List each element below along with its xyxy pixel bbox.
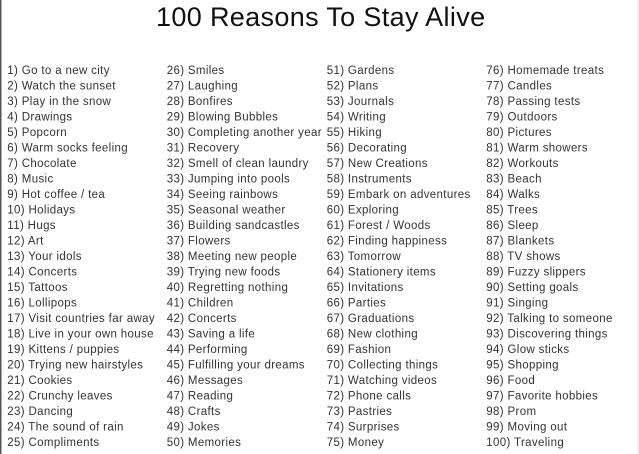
- column: reasons 1 to 25: 7) Chocolate: [7, 158, 77, 170]
- column: reasons 76 to 100: 95) Shopping: [486, 360, 559, 372]
- column: reasons 26 to 50: 41) Children: [167, 298, 234, 310]
- column: reasons 76 to 100: 97) Favorite hobbies: [486, 390, 598, 402]
- column: reasons 76 to 100: 82) Workouts: [486, 158, 559, 170]
- column: reasons 51 to 75: 74) Surprises: [327, 422, 400, 434]
- column: reasons 26 to 50: 49) Jokes: [167, 422, 220, 434]
- column: reasons 26 to 50: 27) Laughing: [167, 80, 238, 92]
- column: reasons 1 to 25: [7, 65, 155, 449]
- column: reasons 76 to 100: 80) Pictures: [486, 127, 552, 139]
- column: reasons 1 to 25: 17) Visit countries far away: [7, 313, 155, 325]
- column: reasons 1 to 25: 22) Crunchy leaves: [7, 390, 113, 402]
- column: reasons 76 to 100: 86) Sleep: [486, 220, 539, 232]
- column: reasons 76 to 100: 83) Beach: [486, 174, 542, 186]
- column: reasons 26 to 50: 35) Seasonal weather: [167, 204, 286, 216]
- column: reasons 1 to 25: 23) Dancing: [7, 406, 73, 418]
- column: reasons 26 to 50: 32) Smell of clean laundry: [167, 158, 309, 170]
- column: reasons 1 to 25: 2) Watch the sunset: [7, 80, 116, 92]
- column: reasons 76 to 100: 98) Prom: [486, 406, 536, 418]
- column: reasons 76 to 100: 89) Fuzzy slippers: [486, 266, 586, 278]
- column: reasons 1 to 25: 3) Play in the snow: [7, 96, 111, 108]
- column: reasons 1 to 25: 5) Popcorn: [7, 127, 67, 139]
- column: reasons 26 to 50: 48) Crafts: [167, 406, 221, 418]
- column: reasons 1 to 25: 8) Music: [7, 174, 54, 186]
- column: reasons 1 to 25: 10) Holidays: [7, 204, 75, 216]
- column: reasons 51 to 75: 62) Finding happiness: [327, 236, 447, 248]
- column: reasons 26 to 50: 45) Fulfilling your dreams: [167, 360, 305, 372]
- column: reasons 51 to 75: 53) Journals: [327, 96, 394, 108]
- column: reasons 76 to 100: 85) Trees: [486, 204, 538, 216]
- column: reasons 76 to 100: 91) Singing: [486, 298, 548, 310]
- column: reasons 26 to 50: 30) Completing another year: [167, 127, 322, 139]
- column: reasons 51 to 75: 63) Tomorrow: [327, 251, 401, 263]
- column: reasons 26 to 50: 47) Reading: [167, 390, 233, 402]
- column: reasons 76 to 100: 78) Passing tests: [486, 96, 580, 108]
- column: reasons 76 to 100: 90) Setting goals: [486, 282, 579, 294]
- column: reasons 51 to 75: 73) Pastries: [327, 406, 392, 418]
- column: reasons 51 to 75: 60) Exploring: [327, 204, 399, 216]
- column: reasons 1 to 25: 13) Your idols: [7, 251, 82, 263]
- column: reasons 26 to 50: 44) Performing: [167, 344, 248, 356]
- column: reasons 1 to 25: 12) Art: [7, 236, 44, 248]
- column: reasons 76 to 100: 92) Talking to someone: [486, 313, 613, 325]
- column: reasons 51 to 75: 75) Money: [327, 437, 384, 449]
- column: reasons 1 to 25: 11) Hugs: [7, 220, 56, 232]
- column: reasons 76 to 100: 84) Walks: [486, 189, 540, 201]
- column: reasons 76 to 100: 93) Discovering things: [486, 328, 608, 340]
- column: reasons 76 to 100: 79) Outdoors: [486, 112, 558, 124]
- column: reasons 26 to 50: 33) Jumping into pools: [167, 174, 290, 186]
- column: reasons 1 to 25: 25) Compliments: [7, 437, 99, 449]
- column: reasons 51 to 75: 52) Plans: [327, 80, 378, 92]
- column: reasons 51 to 75: 71) Watching videos: [327, 375, 437, 387]
- column: reasons 1 to 25: 16) Lollipops: [7, 298, 77, 310]
- column: reasons 51 to 75: 54) Writing: [327, 112, 386, 124]
- column: reasons 26 to 50: 38) Meeting new people: [167, 251, 297, 263]
- column: reasons 76 to 100: [486, 65, 613, 449]
- column: reasons 51 to 75: 58) Instruments: [327, 174, 412, 186]
- column: reasons 26 to 50: 26) Smiles: [167, 65, 225, 77]
- column: reasons 51 to 75: 70) Collecting things: [327, 360, 438, 372]
- column: reasons 1 to 25: 24) The sound of rain: [7, 422, 124, 434]
- column: reasons 26 to 50: 34) Seeing rainbows: [167, 189, 278, 201]
- column: reasons 51 to 75: 66) Parties: [327, 298, 386, 310]
- column: reasons 1 to 25: 9) Hot coffee / tea: [7, 189, 105, 201]
- column: reasons 51 to 75: 55) Hiking: [327, 127, 382, 139]
- column: reasons 76 to 100: 77) Candles: [486, 80, 552, 92]
- column: reasons 26 to 50: 46) Messages: [167, 375, 243, 387]
- column: reasons 76 to 100: 81) Warm showers: [486, 142, 588, 154]
- column: reasons 26 to 50: 50) Memories: [167, 437, 241, 449]
- column: reasons 51 to 75: 67) Graduations: [327, 313, 414, 325]
- column: reasons 51 to 75: 65) Invitations: [327, 282, 404, 294]
- column: reasons 1 to 25: 15) Tattoos: [7, 282, 68, 294]
- column: reasons 26 to 50: 29) Blowing Bubbles: [167, 112, 278, 124]
- column: reasons 76 to 100: 100) Traveling: [486, 437, 564, 449]
- column: reasons 1 to 25: 21) Cookies: [7, 375, 73, 387]
- column: reasons 51 to 75: 51) Gardens: [327, 65, 394, 77]
- column: reasons 51 to 75: 69) Fashion: [327, 344, 391, 356]
- column: reasons 51 to 75: 72) Phone calls: [327, 390, 411, 402]
- column: reasons 76 to 100: 94) Glow sticks: [486, 344, 570, 356]
- column: reasons 51 to 75: 57) New Creations: [327, 158, 428, 170]
- column: reasons 51 to 75: 61) Forest / Woods: [327, 220, 431, 232]
- column: reasons 26 to 50: 42) Concerts: [167, 313, 237, 325]
- column: reasons 1 to 25: 20) Trying new hairstyles: [7, 360, 143, 372]
- column: reasons 51 to 75: 59) Embark on adventures: [327, 189, 471, 201]
- column: reasons 26 to 50: 40) Regretting nothing: [167, 282, 288, 294]
- column: reasons 26 to 50: 28) Bonfires: [167, 96, 233, 108]
- column: reasons 1 to 25: 18) Live in your own house: [7, 328, 154, 340]
- column: reasons 26 to 50: 31) Recovery: [167, 142, 239, 154]
- column: reasons 26 to 50: [167, 65, 322, 449]
- column: reasons 51 to 75: 64) Stationery items: [327, 266, 436, 278]
- column: reasons 51 to 75: [327, 65, 471, 449]
- column: reasons 1 to 25: 4) Drawings: [7, 112, 73, 124]
- column: reasons 51 to 75: 56) Decorating: [327, 142, 407, 154]
- column: reasons 76 to 100: 99) Moving out: [486, 422, 568, 434]
- column: reasons 1 to 25: 14) Concerts: [7, 266, 77, 278]
- column: reasons 26 to 50: 43) Saving a life: [167, 328, 255, 340]
- column: reasons 26 to 50: 37) Flowers: [167, 236, 231, 248]
- column: reasons 51 to 75: 68) New clothing: [327, 328, 418, 340]
- column: reasons 26 to 50: 36) Building sandcastles: [167, 220, 300, 232]
- column: reasons 1 to 25: 1) Go to a new city: [7, 65, 110, 77]
- column: reasons 1 to 25: 19) Kittens / puppies: [7, 344, 120, 356]
- title: 100 Reasons To Stay Alive: [156, 2, 485, 32]
- column: reasons 76 to 100: 87) Blankets: [486, 236, 554, 248]
- column: reasons 76 to 100: 88) TV shows: [486, 251, 561, 263]
- column: reasons 76 to 100: 76) Homemade treats: [486, 65, 604, 77]
- column: reasons 1 to 25: 6) Warm socks feeling: [7, 142, 128, 154]
- column: reasons 76 to 100: 96) Food: [486, 375, 535, 387]
- column: reasons 26 to 50: 39) Trying new foods: [167, 266, 280, 278]
